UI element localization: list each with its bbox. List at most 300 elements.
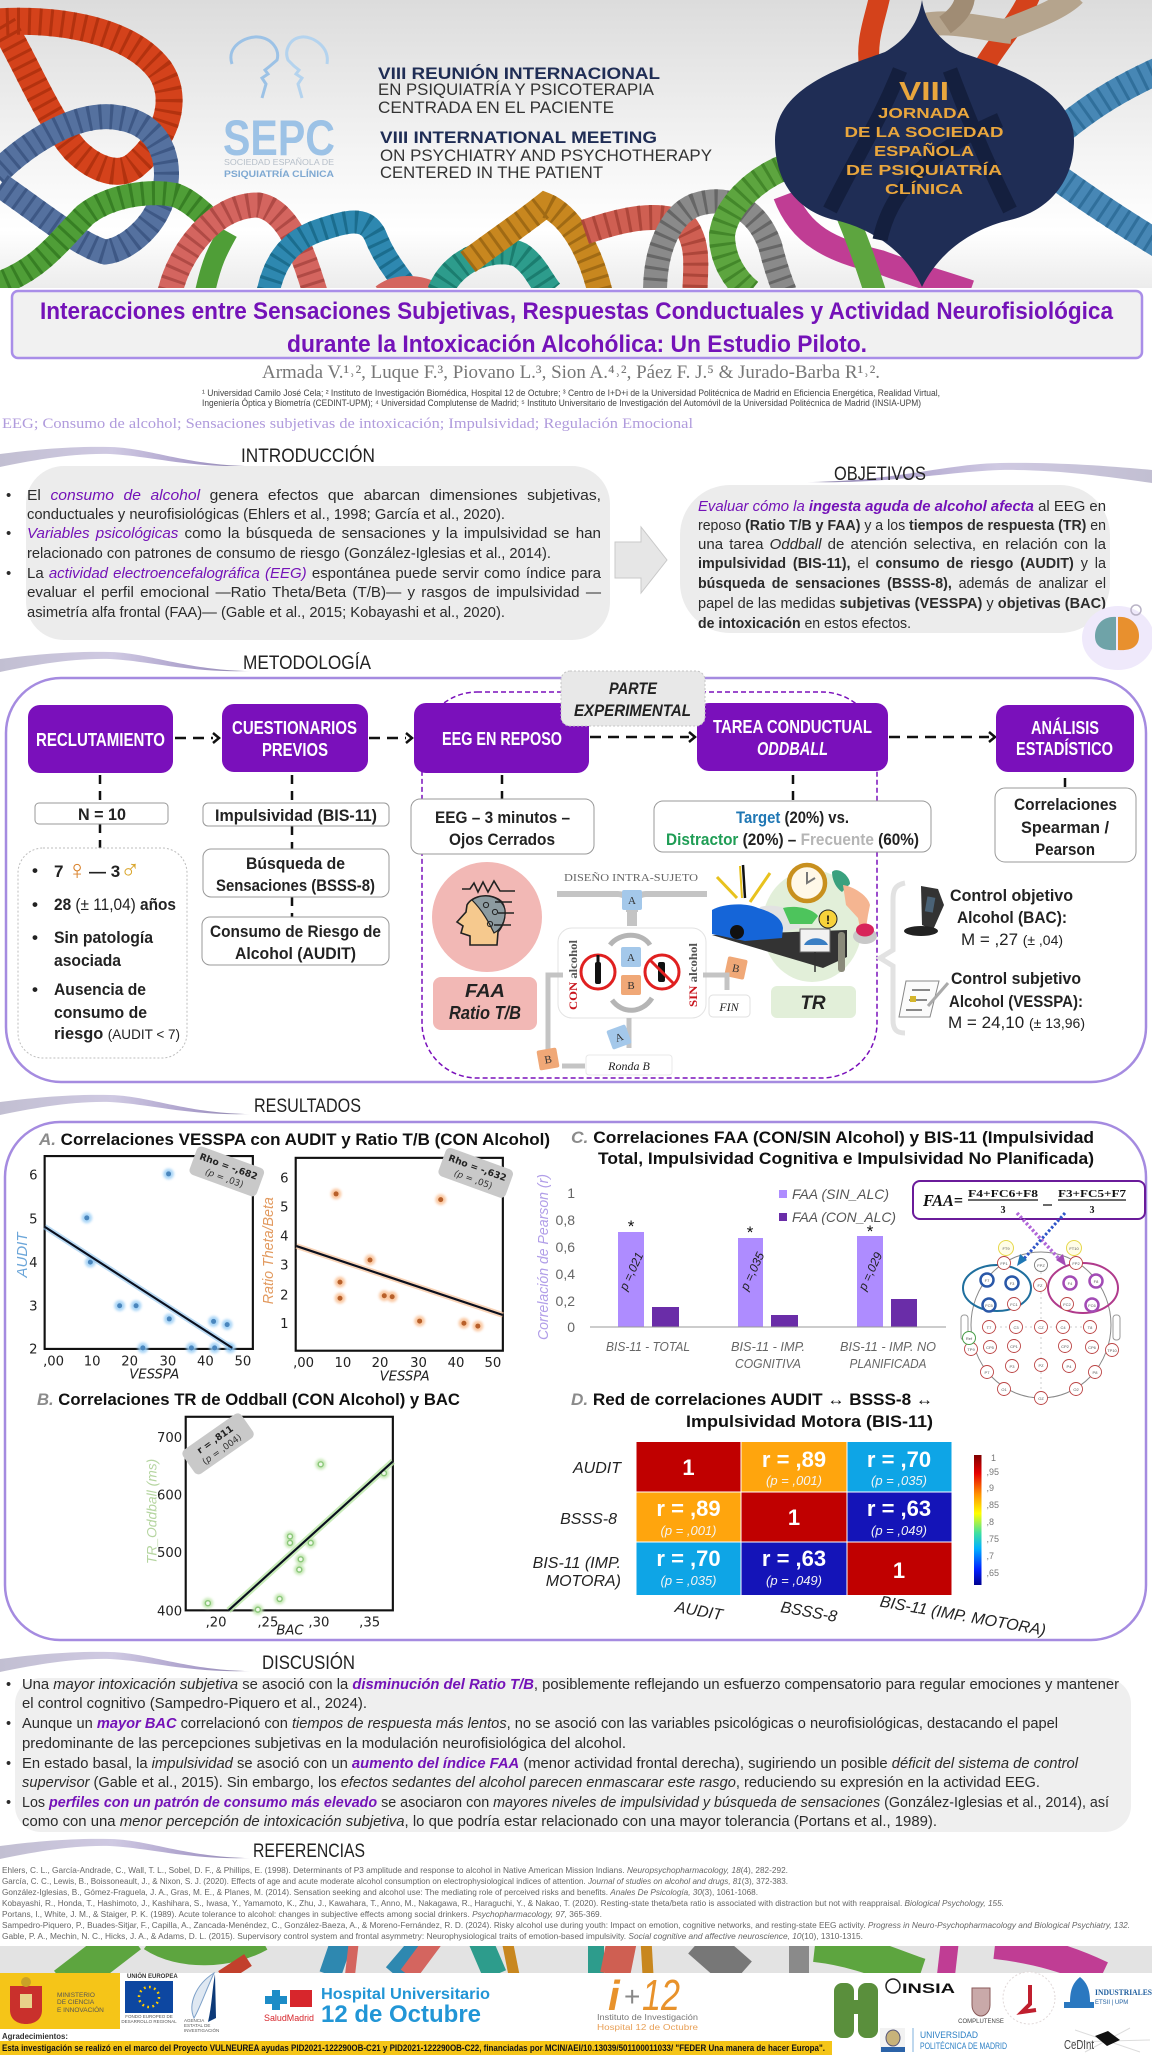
logo: Complutense: [958, 1988, 1004, 2025]
logo: INSIA: INSIA: [902, 1980, 955, 1996]
heading: Objetivos: OBJETIVOS: [834, 464, 926, 485]
meeting names: [378, 64, 712, 182]
box: perfil de la muestra: 7: [54, 862, 63, 881]
heatmap: correlation network: BIS-11 (IMP. MOTORA): [879, 1594, 1047, 1640]
scatter: Ratio Theta/Beta vs VESSPA: [260, 1147, 514, 1384]
panel: introducción: evaluar el perfil emocional —Ratio Theta/Beta (T/B)— y rasgos de impulsividad —: [27, 584, 601, 601]
diagram: diseño intra-sujeto: A: [628, 895, 636, 907]
heatmap: correlation network: (p = ,001): [766, 1473, 822, 1488]
color scale: ,65: [986, 1568, 999, 1578]
bar chart: FAA and BIS-11: *: [867, 1222, 874, 1241]
diagram: diseño intra-sujeto: FIN: [718, 1000, 740, 1014]
scatter: Ratio Theta/Beta vs VESSPA: 10: [334, 1356, 351, 1371]
scatter: Ratio Theta/Beta vs VESSPA: 50: [484, 1356, 501, 1371]
step: análisis estadístico: ESTADÍSTICO: [1016, 738, 1113, 759]
text: control subjetivo: Control subjetivo: [951, 969, 1081, 988]
panel: introducción: La actividad electroencefalográfica (EEG) espontánea puede servir como índice para: [27, 565, 602, 582]
logo: SEPC: SOCIEDAD ESPAÑOLA DE: [224, 157, 334, 167]
step: análisis estadístico: ANÁLISIS: [1031, 717, 1099, 738]
logo: i+12: [597, 1971, 699, 2032]
color scale: ,95: [986, 1467, 999, 1477]
logo: Ministerio de Ciencia e Innovación: DE CIENCIA: [57, 1999, 95, 2006]
bar chart: FAA and BIS-11: 0,4: [556, 1266, 575, 1282]
scatter: AUDIT vs VESSPA: [14, 1145, 265, 1383]
scatter: TR Oddball vs BAC: r = ,811: [195, 1424, 236, 1457]
box: perfil de la muestra: consumo de: [54, 1003, 147, 1022]
scatter: AUDIT vs VESSPA: Rho = -,682: [198, 1151, 259, 1183]
scatter: Ratio Theta/Beta vs VESSPA: Rho = -,632: [447, 1153, 508, 1184]
logo: Universidad Camilo José Cela: [1003, 1972, 1055, 2024]
box: perfil de la muestra: asociada: [54, 951, 122, 970]
scatter: AUDIT vs VESSPA: 30: [159, 1354, 176, 1369]
box: FAA Ratio T/B: Ratio T/B: [449, 1003, 521, 1023]
scatter: TR Oddball vs BAC: ,25: [257, 1615, 278, 1630]
diagram: diseño intra-sujeto: B: [731, 962, 741, 976]
meeting names: ON PSYCHIATRY AND PSYCHOTHERAPY: [380, 147, 712, 165]
step: tarea conductual: ODDBALL: [757, 739, 828, 759]
logo: Hospital 12 de Octubre: Hospital Universitario: [321, 1986, 490, 2003]
box: TR: TR: [800, 993, 826, 1014]
scatter: Ratio Theta/Beta vs VESSPA: 5: [280, 1200, 289, 1215]
references list: González-Iglesias, B., Gómez-Fraguela, J. A., Gras, M. E., & Planes, M. (2014). Sensation seeking and alcohol use: The mediating role of perceived risks and benefits. Anales De Psicología, 30(3), 1061-1068.: [2, 1887, 758, 1897]
panel: introducción: relacionado con patrones de consumo de riesgo (González-Iglesias et al., 2014).: [27, 545, 551, 562]
references list: Kobayashi, R., Honda, T., Hashimoto, J., Kashihara, S., Iwasa, Y., Yamamoto, K., Zhu, J., Kawahara, T., Anno, M., Nakagawa, R., Haraguchi, Y., & Nakao, T. (2020). Resting-state theta/beta ratio is associated with distraction but not with reappraisal. Biological Psychology, 155.: [2, 1898, 1004, 1908]
heatmap: correlation network: 1: [788, 1505, 800, 1530]
heatmap: correlation network: 1: [682, 1455, 695, 1480]
scatter: Ratio Theta/Beta vs VESSPA: VESSPA: [380, 1369, 430, 1384]
keywords: EEG; Consumo de alcohol; Sensaciones subjetivas de intoxicación; Impulsividad; Regulación Emocional: [2, 416, 693, 432]
references list: Sampedro-Piquero, P., Buades-Sitjar, F., Capilla, A., Zancada-Menéndez, C., González-Baeza, A., & Moreno-Fernández, R. D. (2024). Risky alcohol use during youth: Impact on emotion, cognitive networks, and resting-state EEG activity. Progress in Neuro-Psychopharmacology and Biological Psychiatry, 132.: [2, 1920, 1130, 1930]
heading: C: Total, Impulsividad Cognitiva e Impulsividad No Planificada): [598, 1149, 1094, 1168]
scatter: AUDIT vs VESSPA: 20: [121, 1354, 138, 1369]
diagram: EEG electrode head map: FZ: [1038, 1283, 1043, 1288]
panel: objetivos: búsqueda de sensaciones (BSSS-8), además de analizar el: [698, 575, 1106, 592]
panel: resultados: [5, 1122, 1146, 1640]
diagram: diseño intra-sujeto: B: [627, 980, 635, 992]
scatter: AUDIT vs VESSPA: 3: [29, 1300, 37, 1315]
panel: discusión: •: [6, 1795, 11, 1811]
label: parte experimental: [561, 671, 705, 726]
panel: discusión: como con una menor percepción de intoxicación subjetiva , lo que podría estar relacionado con una mayor tolerancia (Portans et al., 1989).: [22, 1814, 937, 1830]
box: perfil de la muestra: ♀: [67, 855, 87, 885]
panel: objetivos: reposo (Ratio T/B y FAA) y a los tiempos de respuesta (TR) en: [698, 517, 1106, 534]
scatter: TR Oddball vs BAC: ,20: [206, 1615, 227, 1630]
step: cuestionarios previos: CUESTIONARIOS: [232, 718, 357, 738]
diagram: EEG electrode head map: FT9: [1002, 1246, 1010, 1251]
color scale: [974, 1453, 999, 1585]
diagram: EEG electrode head map: F8: [1094, 1279, 1099, 1284]
badge: VIII Jornada: [775, 0, 1074, 287]
box: perfil de la muestra: Ausencia de: [54, 980, 146, 999]
box: búsqueda de sensaciones: Sensaciones (BSSS-8): [216, 876, 375, 895]
bar chart: FAA and BIS-11: BIS-11 - IMP.: [731, 1340, 805, 1354]
formula: FAA: F3+FC5+F7: [1058, 1189, 1126, 1200]
box: impulsividad: Impulsividad (BIS-11): [215, 806, 377, 825]
diagram: EEG electrode head map: FC1: [1010, 1302, 1019, 1307]
logo: Industriales: [1064, 1977, 1152, 2008]
box: consumo de riesgo: Alcohol (AUDIT): [235, 944, 356, 963]
text: control subjetivo: [948, 969, 1085, 1032]
logo: Universidad Politécnica de Madrid: [880, 2028, 1007, 2052]
panel: discusión: [6, 1677, 1131, 1832]
bracket: [880, 883, 905, 1033]
heading: Metodología: METODOLOGÍA: [243, 653, 371, 674]
heading: Resultados: RESULTADOS: [254, 1096, 361, 1117]
references list: [2, 1865, 1130, 1941]
badge: VIII Jornada: DE PSIQUIATRÍA: [846, 162, 1002, 179]
text: control objetivo: M = ,27 (± ,04): [961, 930, 1063, 949]
bar chart: FAA and BIS-11: COGNITIVA: [735, 1357, 801, 1371]
bar chart: FAA and BIS-11: BIS-11 - TOTAL: [606, 1340, 690, 1354]
logo: Complutense: COMPLUTENSE: [958, 2019, 1004, 2025]
panel: introducción: •: [6, 565, 11, 582]
color scale: ,9: [986, 1483, 994, 1493]
bar chart: FAA and BIS-11: *: [628, 1217, 635, 1236]
formula: FAA: F4+FC6+F8: [968, 1189, 1038, 1200]
references list: Gable, P. A., Mechin, N. C., Hicks, J. A., & Adams, D. L. (2015). Supervisory control system and frontal asymmetry: Neurophysiological traits of emotion-based impulsivity. Social cognitive and affective neuroscience, 10(10), 1310-1315.: [2, 1931, 863, 1941]
panel: discusión: supervisor (Gable et al., 2015). Sin embargo, los efectos sedantes del alcohol parecen enmascarar este rasgo, reduciendo su expresión en la actividad EEG.: [22, 1775, 1040, 1791]
box: correlaciones: Spearman /: [1021, 818, 1109, 837]
logo: i+12: i: [608, 1972, 621, 2019]
diagram: EEG electrode head map: P4: [1067, 1364, 1072, 1369]
panel: objetivos: papel de las medidas subjetivas (VESSPA) y objetivas (BAC): [698, 595, 1106, 612]
scatter: Ratio Theta/Beta vs VESSPA: 20: [372, 1356, 388, 1371]
diagram: EEG electrode head map: [961, 1213, 1120, 1404]
logo: SEPC: SEPC: [223, 110, 335, 166]
diagram: EEG electrode head map: C4: [1060, 1325, 1066, 1330]
heatmap: correlation network: (p = ,049): [766, 1573, 822, 1588]
bar chart: FAA and BIS-11: 0,6: [556, 1239, 575, 1255]
logo: i+12: Instituto de Investigación: [597, 2013, 698, 2022]
formula: FAA: FAA=: [922, 1191, 963, 1210]
rope illustration: [0, 0, 1152, 292]
panel: objetivos: impulsividad (BIS-11), el consumo de riesgo (AUDIT) y la: [698, 555, 1107, 572]
formula: FAA: 3: [1000, 1205, 1006, 1216]
box: perfil de la muestra: — 3: [89, 862, 120, 881]
rope strip: [0, 1946, 1152, 1973]
scatter: AUDIT vs VESSPA: (p = ,03): [204, 1167, 245, 1190]
bar chart: FAA and BIS-11: BIS-11 - IMP. NO: [840, 1340, 936, 1354]
scatter: Ratio Theta/Beta vs VESSPA: (p = ,05): [453, 1169, 493, 1192]
scatter: TR Oddball vs BAC: 500: [157, 1546, 182, 1561]
step: cuestionarios previos: [222, 704, 368, 772]
step: análisis estadístico: [996, 705, 1134, 772]
diagram: EEG electrode head map: P8: [1093, 1370, 1098, 1375]
diagram: EEG electrode head map: Ref: [966, 1336, 973, 1341]
logo: i+12: Hospital 12 de Octubre: [597, 2023, 699, 2032]
box: perfil de la muestra: •: [32, 895, 38, 914]
diagram: diseño intra-sujeto: Ronda B: [607, 1059, 650, 1073]
step: EEG en reposo: [414, 703, 589, 773]
logo: Unión Europea: [121, 1972, 178, 2024]
diagram: EEG electrode head map: FC5: [985, 1303, 994, 1308]
scatter: Ratio Theta/Beta vs VESSPA: 1: [280, 1317, 289, 1332]
logo: Unión Europea: UNIÓN EUROPEA: [127, 1972, 178, 1980]
scatter: Ratio Theta/Beta vs VESSPA: 6: [280, 1171, 289, 1186]
authors: Armada V.¹˒², Luque F.³, Piovano L.³, Sion A.⁴˒², Páez F. J.⁵ & Jurado-Barba R¹˒².: [262, 362, 880, 383]
box: EEG 3 minutos: [411, 799, 594, 854]
bar chart: FAA and BIS-11: 1: [567, 1185, 575, 1201]
step: reclutamiento: [28, 705, 173, 773]
box: TR: [771, 986, 856, 1018]
scatter: Ratio Theta/Beta vs VESSPA: Ratio Theta/Beta: [260, 1197, 277, 1304]
heatmap: correlation network: BSSS-8: [779, 1599, 838, 1626]
heatmap: correlation network: r = ,89: [762, 1447, 826, 1472]
box: target distractor frecuente: [654, 801, 931, 852]
bar chart: FAA and BIS-11: [536, 1174, 946, 1371]
meeting names: VIII REUNIÓN INTERNACIONAL: [378, 64, 660, 83]
acknowledgements: Agradecimientos:: [2, 2031, 68, 2041]
color scale: ,8: [986, 1517, 994, 1527]
logo: Agencia Estatal de Investigación: ESTATAL DE: [184, 2023, 210, 2028]
icon: brain: [1082, 605, 1152, 670]
panel: introducción: conductuales y neurofisiológicas (Ehlers et al., 1998; García et al., 2020).: [27, 506, 505, 523]
heatmap: correlation network: BIS-11 (IMP.: [533, 1555, 621, 1572]
panel: discusión: Una mayor intoxicación subjetiva se asoció con la disminución del Ratio T/B, posiblemente reflejando un esfuerzo compensatorio para regular emociones y mantener: [22, 1677, 1119, 1693]
legend: [779, 1186, 896, 1225]
scatter: Ratio Theta/Beta vs VESSPA: ,00: [293, 1356, 314, 1371]
panel: discusión: Aunque un mayor BAC correlacionó con tiempos de respuesta más lentos, no se asoció con las variables psicológicas o neurofisiológicas, destacando el papel: [22, 1716, 1058, 1732]
color scale: ,85: [986, 1500, 999, 1510]
box: búsqueda de sensaciones: [203, 849, 389, 897]
icon: checklist: [899, 981, 948, 1017]
box: N = 10: N = 10: [78, 805, 126, 824]
diagram: EEG electrode head map: OZ: [1038, 1396, 1044, 1401]
scatter: AUDIT vs VESSPA: 6: [29, 1169, 37, 1184]
panel: objetivos: una tarea Oddball de atención selectiva, en relación con la: [698, 536, 1107, 553]
badge: VIII Jornada: VIII: [899, 76, 949, 106]
scatter: Ratio Theta/Beta vs VESSPA: 4: [280, 1229, 289, 1244]
diagram: EEG electrode head map: CZ: [1038, 1325, 1044, 1330]
badge: VIII Jornada: DE LA SOCIEDAD: [844, 124, 1004, 141]
heatmap: correlation network: r = ,63: [867, 1496, 931, 1521]
diagram: EEG electrode head map: O1: [1001, 1387, 1007, 1392]
box: perfil de la muestra: ♂: [120, 855, 140, 885]
illustration: oddball driving task: !: [826, 913, 830, 927]
diagram: EEG electrode head map: FP1: [1000, 1261, 1008, 1266]
logo: Unión Europea: FONDO EUROPEO DE: [125, 2014, 173, 2019]
box: N = 10: [35, 803, 168, 824]
logo: CeDInt: CeDInt: [1064, 2037, 1094, 2052]
box: consumo de riesgo: Consumo de Riesgo de: [210, 922, 381, 941]
panel: discusión: En estado basal, la impulsividad se asoció con un aumento del índice FAA (menor actividad frontal derecha), sugiriendo un posible déficit del sistema de control: [22, 1756, 1079, 1772]
logo: Agencia Estatal de Investigación: AGENCIA: [184, 2018, 204, 2023]
scatter: Ratio Theta/Beta vs VESSPA: 40: [448, 1356, 464, 1371]
text: control objetivo: [950, 886, 1073, 949]
scatter: Ratio Theta/Beta vs VESSPA: 3: [280, 1259, 289, 1274]
logo: Universidad Politécnica de Madrid: POLITÉCNICA DE MADRID: [920, 2041, 1007, 2051]
scatter: AUDIT vs VESSPA: VESSPA: [129, 1368, 179, 1383]
panel: introducción: [6, 466, 610, 640]
diagram: EEG electrode head map: CP5: [986, 1345, 995, 1350]
box: FAA Ratio T/B: [433, 977, 537, 1030]
references list: Portans, I., White, J. M., & Staiger, P. K. (1989). Acute tolerance to alcohol: changes in subjective effects among social drinkers. Psychopharmacology, 97, 365-369.: [2, 1909, 602, 1919]
diagram: diseño intra-sujeto: [536, 872, 750, 1075]
box: correlaciones: [995, 788, 1136, 862]
panel: objetivos: de intoxicación en estos efectos.: [698, 615, 911, 632]
diagram: diseño intra-sujeto: SIN alcohol: [686, 942, 700, 1007]
box: perfil de la muestra: •: [32, 861, 38, 880]
diagram: EEG electrode head map: PZ: [1038, 1363, 1044, 1368]
bar chart: FAA and BIS-11: p =,035: [737, 1250, 767, 1293]
logo: Ministerio de Ciencia e Innovación: MINISTERIO: [57, 1992, 95, 1999]
heatmap: correlation network: AUDIT: [673, 1599, 725, 1624]
logo: Ministerio de Ciencia e Innovación: [0, 1973, 120, 2029]
heading: C: [571, 1128, 1094, 1168]
bar chart: FAA and BIS-11: *: [747, 1223, 754, 1242]
box: perfil de la muestra: •: [32, 928, 38, 947]
diagram: EEG electrode head map: CP6: [1088, 1345, 1097, 1350]
box: perfil de la muestra: 28 (± 11,04) años: [54, 895, 176, 914]
heading: B: B. Correlaciones TR de Oddball (CON Alcohol) y BAC: [37, 1390, 460, 1409]
panel: objetivos: [680, 485, 1110, 633]
box: consumo de riesgo: [202, 917, 389, 965]
step: EEG en reposo: EEG EN REPOSO: [442, 729, 562, 749]
references list: García, C. C., Lewis, B., Boissoneault, J., & Nixon, S. J. (2020). Effects of age and acute moderate alcohol consumption on electrophysiological indices of attention. Journal of studies on alcohol and drugs, 81(3), 372-383.: [2, 1876, 788, 1886]
heading: Introducción: INTRODUCCIÓN: [241, 445, 375, 467]
diagram: EEG electrode head map: TP10: [1107, 1348, 1118, 1353]
box: EEG 3 minutos: Ojos Cerrados: [449, 830, 555, 849]
heatmap: correlation network: 1: [893, 1558, 905, 1583]
acknowledgements: [0, 2031, 832, 2055]
heading: D: Impulsividad Motora (BIS-11): [686, 1412, 933, 1431]
heatmap: correlation network: r = ,63: [762, 1546, 826, 1571]
box: perfil de la muestra: Sin patología: [54, 928, 153, 947]
logo: Hospital 12 de Octubre: SaludMadrid: [264, 2013, 314, 2024]
heatmap: correlation network: MOTORA): [546, 1573, 621, 1590]
heading: A: A. Correlaciones VESSPA con AUDIT y Ratio T/B (CON Alcohol): [38, 1130, 550, 1149]
diagram: EEG electrode head map: F7: [985, 1278, 990, 1283]
diagram: EEG electrode head map: CP2: [1061, 1344, 1070, 1349]
step: tarea conductual: [697, 703, 888, 771]
logo: i+12: +: [624, 1981, 640, 2012]
logo: Unión Europea: DESARROLLO REGIONAL: [121, 2019, 177, 2024]
meeting names: CENTERED IN THE PATIENT: [380, 164, 603, 182]
scatter: TR Oddball vs BAC: ,30: [308, 1615, 329, 1630]
diagram: EEG electrode head map: F4: [1068, 1281, 1073, 1286]
label: parte experimental: EXPERIMENTAL: [574, 701, 691, 720]
step: cuestionarios previos: PREVIOS: [262, 740, 328, 760]
bar chart: FAA and BIS-11: p =,029: [855, 1250, 885, 1293]
logo: CeDInt: [1064, 2028, 1150, 2052]
diagram: diseño intra-sujeto: CON alcohol: [566, 939, 580, 1010]
heatmap: correlation network: [533, 1442, 1047, 1640]
panel: introducción: •: [6, 487, 11, 504]
experimental frame: [422, 692, 877, 1078]
panel: discusión: •: [6, 1756, 11, 1772]
panel: introducción: •: [6, 525, 11, 542]
diagram: EEG electrode head map: F3: [1010, 1281, 1015, 1286]
scatter: AUDIT vs VESSPA: 4: [29, 1256, 37, 1271]
box: búsqueda de sensaciones: Búsqueda de: [246, 854, 345, 873]
scatter: AUDIT vs VESSPA: 10: [84, 1354, 101, 1369]
diagram: EEG electrode head map: FC2: [1063, 1302, 1072, 1307]
logo: SEPC: PSIQUIATRÍA CLÍNICA: [224, 169, 335, 179]
color scale: 1: [991, 1453, 996, 1463]
icon: EEG head: [432, 862, 542, 972]
bar chart: FAA and BIS-11: p =,021: [616, 1250, 646, 1293]
box: target distractor frecuente: Distractor (20%) – Frecuente (60%): [666, 830, 919, 849]
icon: breathalyzer: [904, 886, 944, 936]
heatmap: correlation network: (p = ,049): [871, 1523, 927, 1538]
meeting names: VIII INTERNATIONAL MEETING: [380, 129, 657, 147]
scatter: TR Oddball vs BAC: BAC: [276, 1624, 304, 1639]
box: perfil de la muestra: •: [32, 980, 38, 999]
banner header: [0, 0, 1152, 292]
panel: introducción: El consumo de alcohol genera efectos que abarcan dimensiones subjetivas,: [27, 487, 601, 504]
text: control subjetivo: M = 24,10 (± 13,96): [948, 1013, 1085, 1032]
scatter: Ratio Theta/Beta vs VESSPA: 2: [280, 1288, 289, 1303]
diagram: EEG electrode head map: FT10: [1069, 1246, 1079, 1251]
badge: VIII Jornada: ESPAÑOLA: [874, 142, 974, 160]
bar chart: FAA and BIS-11: Correlación de Pearson (r): [536, 1174, 552, 1340]
affiliations: Ingeniería Óptica y Biometría (CEDINT-UPM); ⁴ Universidad Complutense de Madrid; ⁵ Instituto Universitario de Investigación del Automóvil de la Universidad Politécnica de Madrid (INSIA-UPM): [202, 398, 921, 408]
affiliations: ¹ Universidad Camilo José Cela; ² Instituto de Investigación Biomédica, Hospital 12 de Octubre; ³ Centro de I+D+i de la Universidad Politécnica de Madrid en Eficiencia Energética, Realidad Virtual,: [202, 388, 940, 398]
scatter: TR Oddball vs BAC: ,35: [359, 1615, 380, 1630]
diagram: EEG electrode head map: P3: [1010, 1364, 1015, 1369]
affiliations: [202, 388, 940, 408]
heatmap: correlation network: r = ,70: [867, 1447, 931, 1472]
heatmap: correlation network: AUDIT: [572, 1460, 622, 1477]
legend: FAA (CON_ALC): [792, 1209, 896, 1225]
scatter: AUDIT vs VESSPA: 2: [29, 1343, 37, 1358]
diagram: EEG electrode head map: O2: [1073, 1387, 1079, 1392]
panel: objetivos: Evaluar cómo la ingesta aguda de alcohol afecta al EEG en: [698, 498, 1106, 515]
heading: Discusión: DISCUSIÓN: [262, 1652, 355, 1674]
color scale: ,75: [986, 1534, 999, 1544]
color scale: ,7: [986, 1551, 994, 1561]
text: control subjetivo: Alcohol (VESSPA):: [949, 992, 1083, 1011]
meeting names: CENTRADA EN EL PACIENTE: [378, 99, 614, 117]
scatter: Ratio Theta/Beta vs VESSPA: 30: [410, 1356, 427, 1371]
scatter: AUDIT vs VESSPA: ,00: [43, 1354, 64, 1369]
illustration: oddball driving task: [712, 865, 877, 982]
heatmap: correlation network: (p = ,035): [660, 1573, 717, 1588]
heading: Referencias: REFERENCIAS: [253, 1841, 365, 1862]
formula: FAA: [913, 1181, 1145, 1219]
box: correlaciones: Correlaciones: [1014, 795, 1117, 814]
logo: INSIA: [886, 1979, 955, 1996]
diagram: diseño intra-sujeto: DISEÑO INTRA-SUJETO: [564, 872, 698, 884]
scatter: TR Oddball vs BAC: 700: [157, 1431, 182, 1446]
panel: discusión: •: [6, 1716, 11, 1732]
label: parte experimental: PARTE: [609, 679, 658, 698]
bar chart: FAA and BIS-11: 0,8: [556, 1212, 575, 1228]
heading: C: C. Correlaciones FAA (CON/SIN Alcohol) y BIS-11 (Impulsividad: [571, 1128, 1094, 1147]
box: EEG 3 minutos: EEG – 3 minutos –: [435, 808, 570, 827]
diagram: EEG electrode head map: FPZ: [1037, 1263, 1045, 1268]
logo: Hospital 12 de Octubre: 12 de Octubre: [321, 2001, 481, 2028]
text: control objetivo: Control objetivo: [950, 886, 1073, 905]
acknowledgements: Esta investigación se realizó en el marco del Proyecto VULNEUREA ayudas PID2021-122290OB-C21 y PID2021-122290OB-C22, financiadas por MCIN/AEI/10.13039/501100011033/ "FEDER Una manera de hacer Europa".: [2, 2043, 825, 2053]
diagram: diseño intra-sujeto: B: [544, 1053, 553, 1067]
diagram: diseño intra-sujeto: A: [627, 952, 635, 964]
logo: Hospital 12 de Octubre: [264, 1986, 490, 2028]
scatter: TR Oddball vs BAC: 400: [157, 1604, 182, 1619]
scatter: TR Oddball vs BAC: [144, 1411, 393, 1639]
bar chart: FAA and BIS-11: PLANIFICADA: [850, 1357, 926, 1371]
heading: D: D. Red de correlaciones AUDIT ↔ BSSS-8 ↔: [571, 1390, 933, 1409]
scatter: TR Oddball vs BAC: (p = ,004): [201, 1433, 244, 1467]
diagram: EEG electrode head map: C3: [1013, 1325, 1019, 1330]
logo: Ministerio de Ciencia e Innovación: E INNOVACIÓN: [57, 2005, 104, 2014]
diagram: EEG electrode head map: T7: [987, 1325, 992, 1330]
panel: discusión: Los perfiles con un patrón de consumo más elevado se asociaron con mayores niveles de impulsividad y búsqueda de sensaciones (González-Iglesias et al., 2014), así: [22, 1795, 1109, 1811]
logo: Agencia Estatal de Investigación: INVESTIGACIÓN: [184, 2027, 219, 2033]
logo: Industriales: ETSII | UPM: [1095, 2000, 1128, 2006]
logo: i+12: 12: [642, 1971, 680, 2020]
formula: FAA: 3: [1090, 1205, 1094, 1216]
